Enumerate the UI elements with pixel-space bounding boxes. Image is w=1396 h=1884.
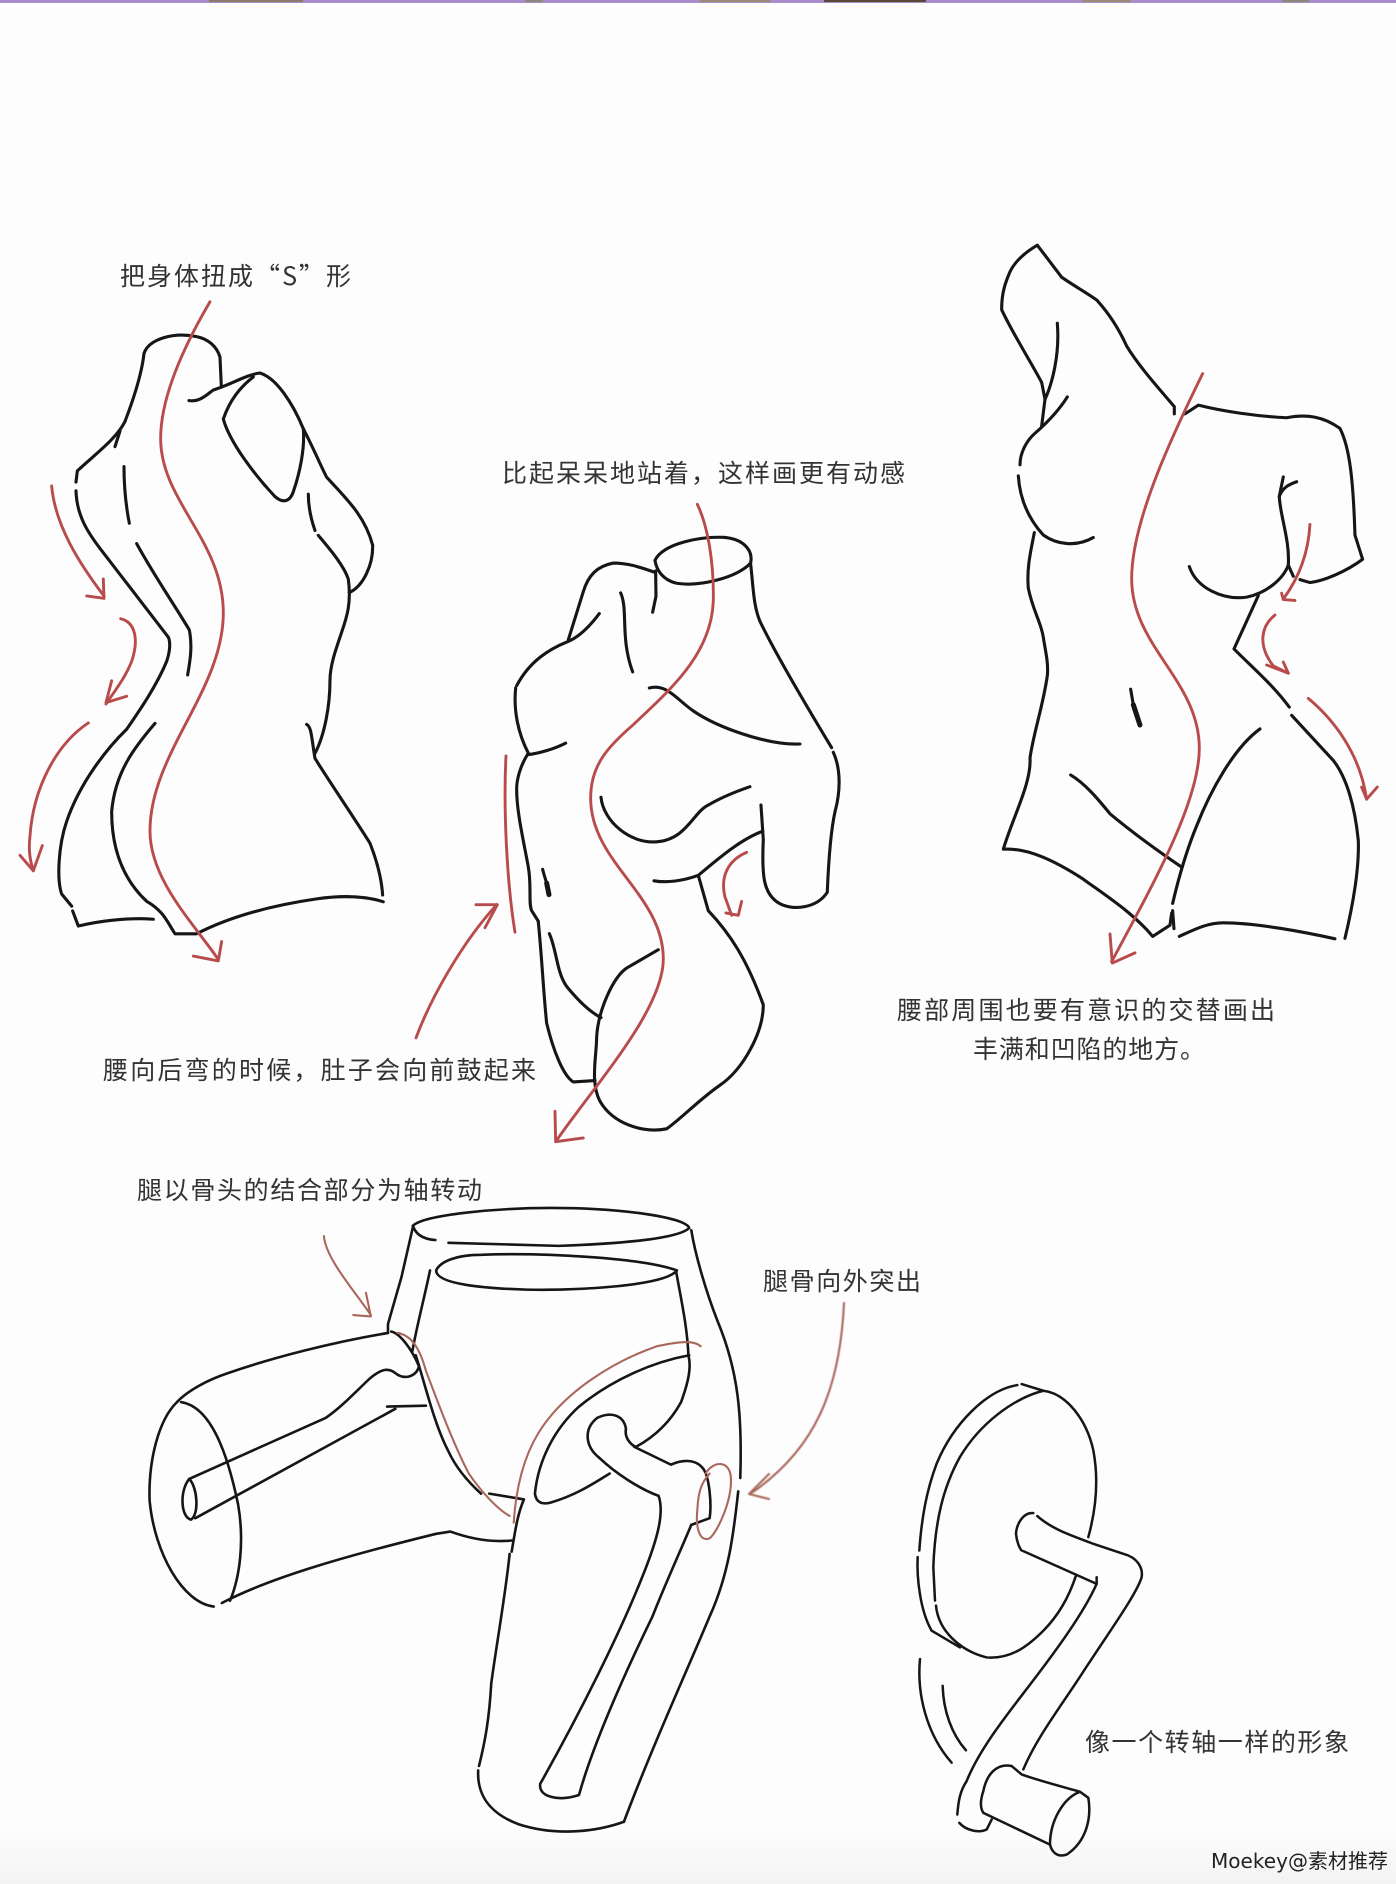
crank arm xyxy=(957,1513,1142,1831)
figure 3: front torso xyxy=(1002,245,1377,963)
torso outline xyxy=(59,335,383,934)
text: waist note: 丰满和凹陷的地方。 xyxy=(973,1030,1205,1066)
crank handle xyxy=(981,1765,1089,1856)
red S curve arrow xyxy=(1110,374,1203,963)
motion lines xyxy=(919,1659,966,1763)
text: dynamic pose note: 比起呆呆地站着，这样画更有动感 xyxy=(502,454,905,490)
text: belly note: 腰向后弯的时候，肚子会向前鼓起来 xyxy=(103,1051,536,1087)
text: waist note xyxy=(897,991,1275,1066)
red joint outlines xyxy=(397,1333,731,1539)
pelvis and legs outline xyxy=(149,1208,741,1832)
raised leg bone xyxy=(182,1332,426,1520)
red S curve arrow xyxy=(555,504,713,1142)
figure 1: torso twisted into S xyxy=(20,302,383,961)
text: S shape note: 把身体扭成“S”形 xyxy=(120,257,351,293)
torso outline xyxy=(1002,245,1363,939)
figure 4: pelvis and legs with bones xyxy=(149,1208,741,1832)
text: waist note: 腰部周围也要有意识的交替画出 xyxy=(897,991,1275,1027)
disc xyxy=(917,1384,1096,1658)
watermark: Moekey@素材推荐 xyxy=(1211,1849,1388,1873)
red S curve arrow xyxy=(150,302,223,961)
torso outline xyxy=(515,537,839,1130)
red arrow to hip joint xyxy=(324,1236,371,1316)
text: leg bone note: 腿骨向外突出 xyxy=(763,1262,921,1298)
text: crank note: 像一个转轴一样的形象 xyxy=(1085,1723,1349,1759)
text: leg rotation note: 腿以骨头的结合部分为轴转动 xyxy=(137,1171,482,1207)
standing leg femur xyxy=(540,1415,710,1798)
red side arrows xyxy=(20,486,135,871)
figure 5: crank shaft xyxy=(917,1384,1142,1856)
red belly line and arrows xyxy=(416,756,747,1038)
top purple strip xyxy=(0,0,1396,3)
red side arrows xyxy=(1263,524,1377,799)
figure 2: arched torso xyxy=(416,504,839,1142)
red arrow to protruding leg bone xyxy=(749,1303,844,1499)
